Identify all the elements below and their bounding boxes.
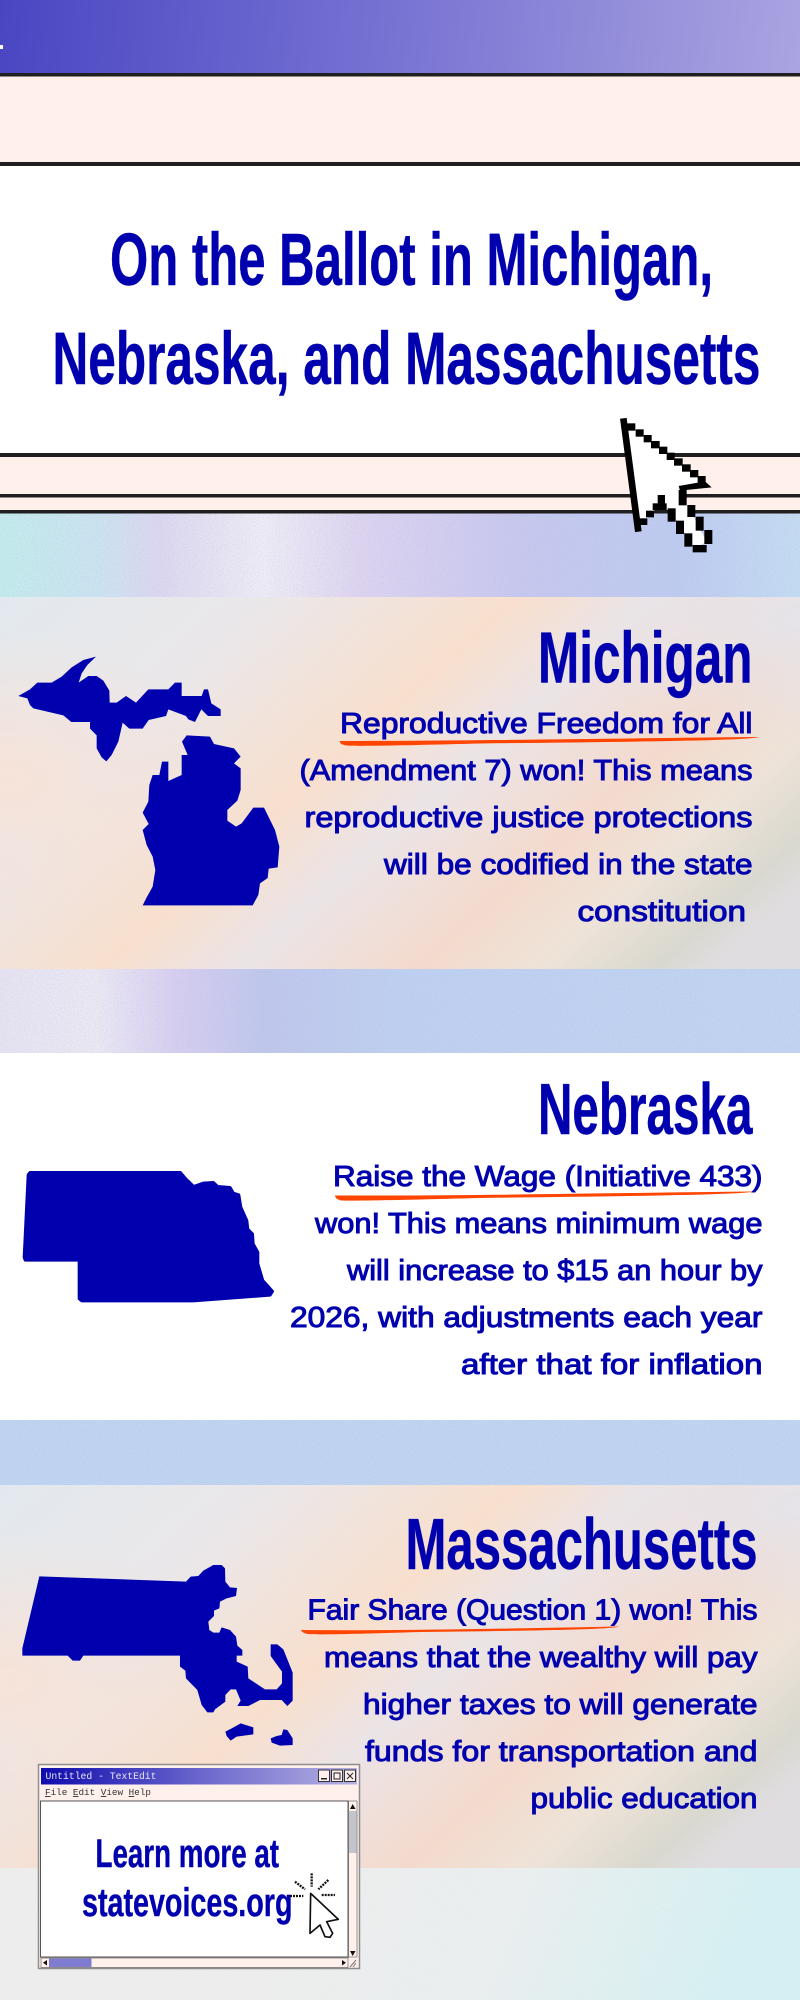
text: Massachusetts body (308, 1594, 758, 1815)
text: Nebraska body: will increase to $15 an hour by (346, 1255, 763, 1287)
title (52, 218, 760, 400)
header gradient bar (0, 0, 800, 73)
text: Massachusetts body: public education (530, 1783, 758, 1815)
text: Nebraska body (290, 1161, 763, 1381)
text: Nebraska body: after that for inflation (461, 1349, 762, 1381)
text: Michigan body (300, 708, 752, 928)
text editor window (38, 1764, 360, 1968)
window menu bar: File Edit View Help (45, 1787, 151, 1798)
text: Michigan body: constitution (578, 896, 746, 928)
pink stripes below title (0, 453, 800, 514)
window content (40, 1801, 348, 1957)
text: Michigan body: Reproductive Freedom for All (340, 708, 752, 740)
underline: Nebraska (335, 1192, 754, 1201)
text: Nebraska body: Raise the Wage (Initiative 433) (333, 1161, 762, 1193)
text: Massachusetts body: funds for transportation and (365, 1736, 758, 1768)
icon: Massachusetts map (22, 1565, 293, 1746)
text: Massachusetts body: means that the wealthy will pay (324, 1642, 758, 1674)
window title bar (41, 1768, 357, 1784)
underline: Massachusetts (301, 1626, 619, 1634)
gradient band 3 (0, 1420, 800, 1485)
link text: Learn more at (96, 1832, 279, 1876)
text: Nebraska body: won! This means minimum wage (314, 1208, 762, 1240)
underline: Michigan (340, 737, 759, 746)
icon: Nebraska map (24, 1173, 272, 1301)
text: Massachusetts body: Fair Share (Question 1) won! This (308, 1594, 758, 1626)
gradient band 4 (0, 1868, 800, 2000)
text: Nebraska body: 2026, with adjustments each year (290, 1302, 763, 1334)
header pink band (0, 73, 800, 166)
link text (82, 1832, 292, 1925)
small click cursor (290, 1873, 338, 1937)
horizontal scrollbar (41, 1958, 356, 1968)
window title bar: Untitled - TextEdit (46, 1771, 156, 1782)
gradient band 2 (0, 969, 800, 1053)
link text: statevoices.org (82, 1881, 292, 1925)
title panel (0, 166, 800, 453)
icon: Michigan map (18, 657, 279, 905)
panel: Nebraska (0, 1053, 800, 1420)
text: Michigan body: (Amendment 7) won! This means (300, 755, 752, 787)
vertical scrollbar (348, 1801, 357, 1957)
text: Michigan body: will be codified in the state (383, 849, 752, 881)
panel: Michigan (0, 597, 800, 969)
gradient band 1 (0, 514, 800, 598)
panel: Massachusetts (0, 1485, 800, 1868)
text: Massachusetts body: higher taxes to will generate (363, 1689, 758, 1721)
big pixel cursor (623, 418, 712, 552)
text: Michigan body: reproductive justice protections (304, 802, 752, 834)
